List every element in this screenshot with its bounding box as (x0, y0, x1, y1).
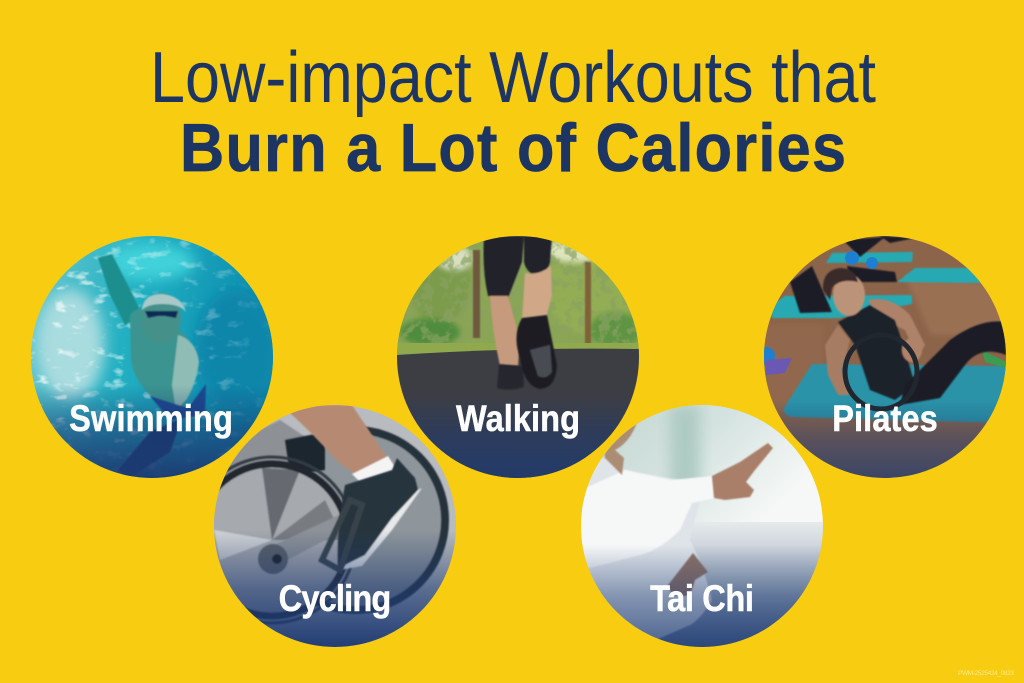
label: walking: Walking (456, 398, 580, 439)
crank (258, 515, 339, 574)
front mat (784, 364, 1010, 423)
panel: pilates (757, 236, 1010, 478)
pedal (322, 500, 362, 570)
panel: swimming (31, 236, 275, 478)
upper hand (712, 443, 773, 500)
trees (400, 238, 641, 348)
floor boards (910, 282, 1000, 334)
lower hand (668, 553, 708, 596)
woman (823, 268, 1006, 405)
title (150, 38, 876, 186)
image code: PWM-2525424_0823 (958, 670, 1014, 677)
flywheel (214, 454, 352, 625)
sock (352, 456, 397, 482)
back mats (772, 252, 982, 318)
swimmer (98, 254, 206, 478)
road (397, 349, 639, 478)
sleeve (581, 470, 716, 570)
shoes (497, 315, 557, 390)
purple block (766, 358, 792, 375)
green block (982, 352, 1006, 368)
label: pilates: Pilates (832, 398, 938, 439)
rear wheel (312, 426, 450, 614)
label: tai chi: Tai Chi (650, 578, 754, 619)
face and neck (604, 424, 638, 476)
seat tube housing (220, 420, 304, 488)
title: Low-impact Workouts that (150, 38, 876, 118)
pilates ring (845, 335, 917, 409)
grass (397, 343, 639, 353)
torso (581, 458, 712, 647)
panel: walking (397, 236, 641, 478)
shoe (338, 458, 422, 570)
background people (790, 236, 915, 313)
label: swimming: Swimming (69, 398, 233, 439)
leg (290, 405, 386, 473)
title: Burn a Lot of Calories (180, 109, 846, 186)
legs (484, 236, 552, 366)
exercise balls (757, 251, 878, 365)
label: cycling: Cycling (279, 578, 391, 619)
panel: tai chi (581, 405, 823, 647)
panel: cycling (189, 405, 456, 647)
